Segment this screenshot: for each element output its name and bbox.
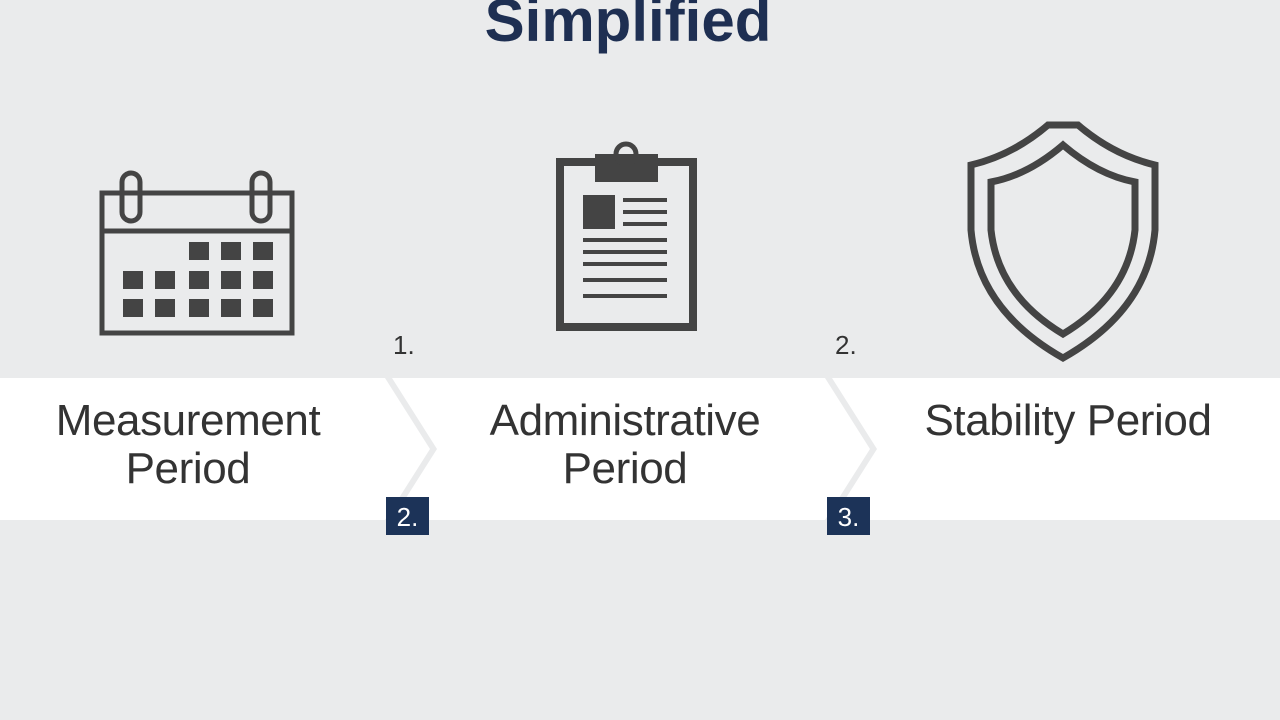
- step 3 label: Stability Period: [924, 396, 1212, 445]
- icon: clipboard: [556, 142, 697, 331]
- icon: calendar: [100, 170, 294, 336]
- step 1 label: Measurement: [56, 396, 320, 445]
- icon: shield: [968, 122, 1158, 362]
- badge 2: 2.: [397, 502, 418, 532]
- badge 2: [386, 497, 429, 535]
- number 2: 2.: [835, 330, 857, 360]
- badge 3: [827, 497, 870, 535]
- step 1 label: [56, 396, 320, 493]
- step 1 label: Period: [126, 444, 250, 493]
- number 1: 1.: [393, 330, 415, 360]
- panel: white step band: [0, 378, 1280, 520]
- badge 3: 3.: [838, 502, 859, 532]
- step 2 label: [490, 396, 760, 493]
- step 2 label: Period: [563, 444, 687, 493]
- step 2 label: Administrative: [490, 396, 760, 445]
